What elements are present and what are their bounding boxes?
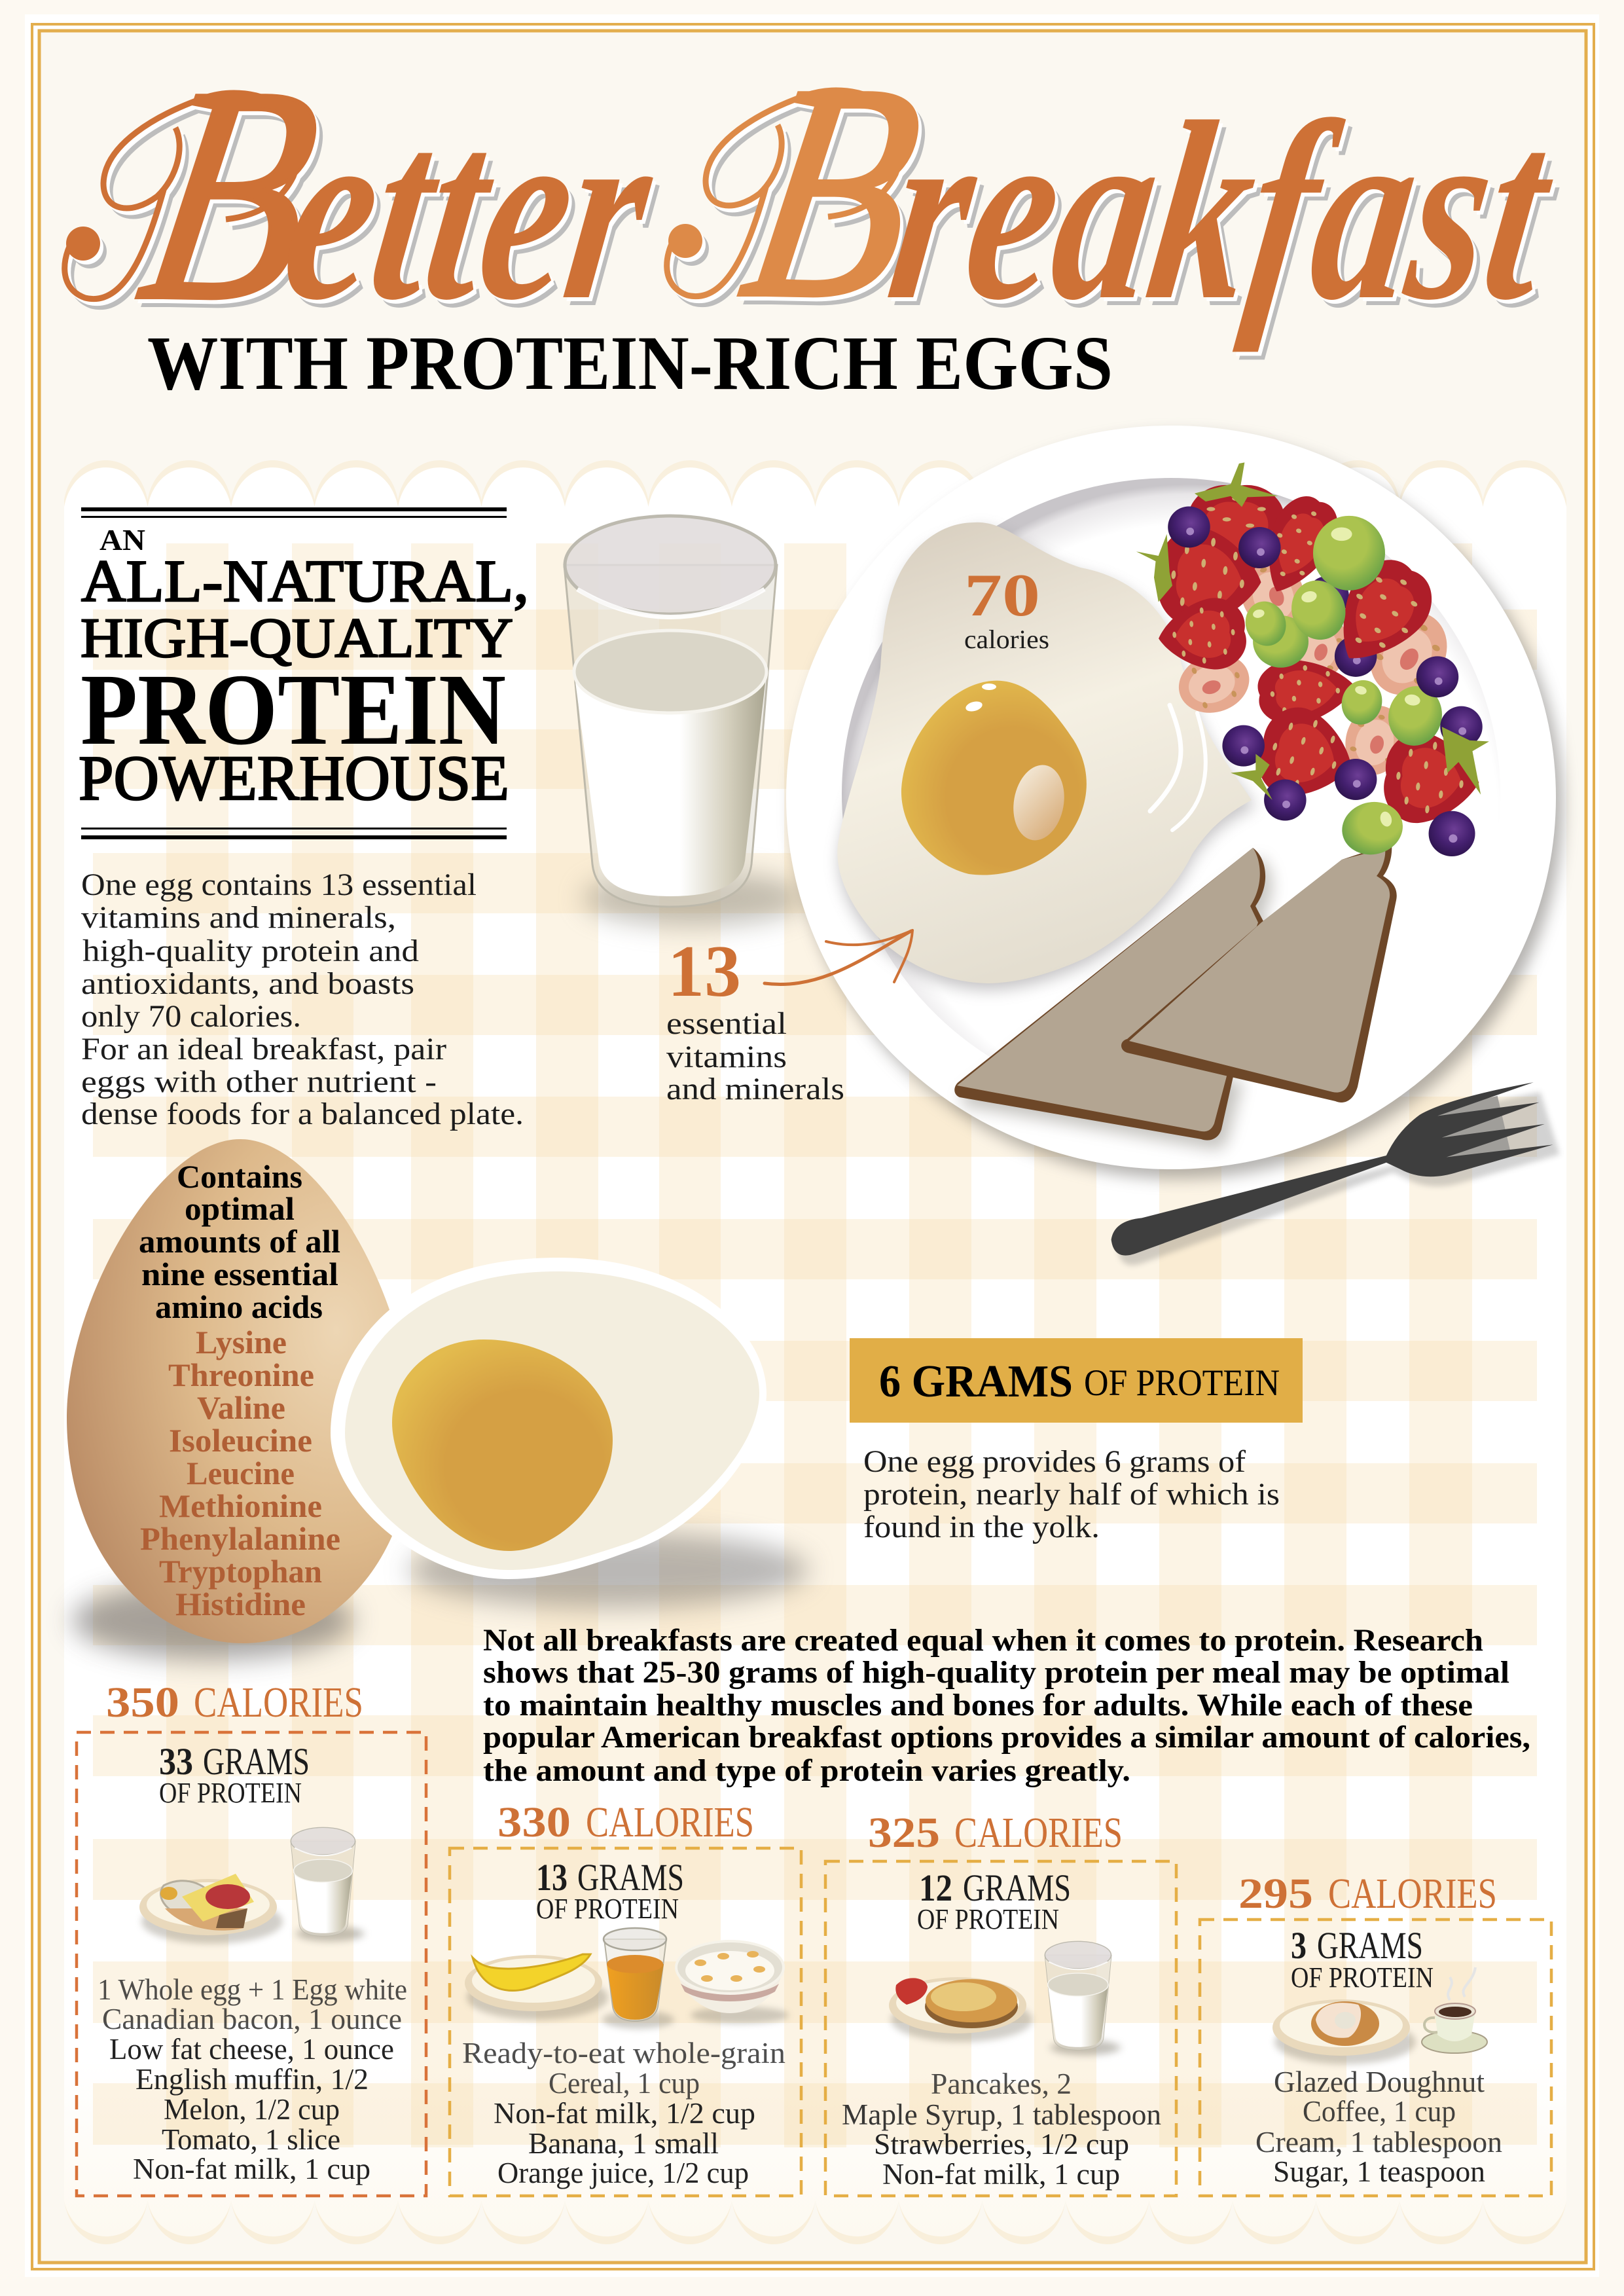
calories heading — [1238, 1870, 1497, 1918]
ingredients: Non-fat milk, 1 cup — [882, 2158, 1120, 2191]
6 grams paragraph: One egg provides 6 grams of — [863, 1444, 1246, 1479]
13 essential vitamins and minerals: vitamins — [666, 1040, 787, 1074]
ingredients: Banana, 1 small — [528, 2127, 719, 2160]
amino acid list: Tryptophan — [159, 1553, 322, 1590]
protein research paragraph: popular American breakfast options provides a similar amount of calories, — [483, 1720, 1530, 1755]
ingredients: Maple Syrup, 1 tablespoon — [842, 2098, 1161, 2131]
amino acid intro — [139, 1158, 340, 1325]
calories heading: CALORIES — [194, 1679, 363, 1726]
protein amount: OF PROTEIN — [917, 1903, 1059, 1935]
ingredients: English muffin, 1/2 — [135, 2063, 369, 2096]
ingredients: Canadian bacon, 1 ounce — [102, 2003, 402, 2035]
arrow to egg — [765, 930, 912, 984]
protein amount: OF PROTEIN — [1291, 1961, 1434, 1994]
fork — [1111, 1082, 1560, 1266]
headline: all-natural protein powerhouse — [79, 507, 529, 839]
calories heading: 350 — [106, 1679, 179, 1726]
amino acid list: Methionine — [159, 1487, 322, 1524]
protein research paragraph: to maintain healthy muscles and bones for adults. While each of these — [483, 1688, 1473, 1722]
amino acid list: Lysine — [196, 1324, 287, 1360]
protein amount: 12 — [919, 1867, 952, 1909]
ingredients: Non-fat milk, 1 cup — [133, 2153, 370, 2185]
ingredients: Non-fat milk, 1/2 cup — [494, 2097, 755, 2130]
icon: egg muffin plate — [139, 1874, 283, 1944]
intro paragraph: only 70 calories. — [81, 999, 301, 1034]
amino acid list: Isoleucine — [169, 1422, 312, 1459]
ingredients: Melon, 1/2 cup — [164, 2093, 340, 2126]
calories heading: 330 — [497, 1798, 571, 1846]
protein amount — [159, 1740, 310, 1809]
ingredients: Glazed Doughnut — [1274, 2066, 1485, 2098]
calories heading — [106, 1679, 363, 1726]
icon: banana plate — [465, 1954, 608, 2020]
calories heading: CALORIES — [954, 1809, 1123, 1857]
protein amount: 33 — [159, 1740, 193, 1783]
card: 350 calories — [77, 1679, 426, 2196]
amino acid intro: amounts of all — [139, 1223, 340, 1260]
ingredients — [462, 2037, 785, 2189]
amino acid list: Threonine — [168, 1357, 314, 1393]
protein amount: GRAMS — [963, 1867, 1071, 1909]
70 calories — [964, 562, 1049, 654]
13 essential vitamins and minerals: 13 — [668, 931, 741, 1012]
icon: doughnut plate — [1272, 1999, 1416, 2064]
protein amount — [1291, 1924, 1434, 1994]
70 calories: 70 — [964, 562, 1040, 629]
toast slices — [954, 843, 1397, 1150]
word: Breakfast: reakfast — [876, 69, 1570, 354]
protein research paragraph — [483, 1623, 1530, 1788]
amino acid list: Leucine — [187, 1455, 295, 1491]
intro paragraph: eggs with other nutrient - — [81, 1065, 437, 1099]
yolk — [901, 681, 1087, 875]
calories heading: 295 — [1238, 1870, 1313, 1918]
13 essential vitamins and minerals — [666, 931, 844, 1106]
boiled egg half — [331, 1258, 809, 1608]
plate — [786, 426, 1563, 1178]
word: Better — [65, 24, 670, 364]
intro paragraph: antioxidants, and boasts — [81, 966, 414, 1001]
glass of milk — [564, 516, 805, 926]
card: 325 calories — [825, 1809, 1176, 2196]
ingredients: Sugar, 1 teaspoon — [1273, 2155, 1485, 2188]
word: Better: etter — [270, 69, 670, 354]
amino acid list: Histidine — [175, 1586, 306, 1622]
13 essential vitamins and minerals: essential — [666, 1006, 787, 1041]
amino acid intro: Contains — [177, 1158, 302, 1195]
protein research paragraph: the amount and type of protein varies greatly. — [483, 1753, 1130, 1788]
intro paragraph: dense foods for a balanced plate. — [81, 1097, 524, 1131]
70 calories: calories — [964, 625, 1049, 654]
plate with egg, fruit and toast — [786, 426, 1563, 1178]
ingredients — [1255, 2066, 1502, 2188]
13 essential vitamins and minerals: and minerals — [666, 1072, 844, 1106]
protein amount: GRAMS — [577, 1856, 684, 1899]
ingredients: Tomato, 1 slice — [162, 2123, 340, 2156]
fruit salad — [1136, 462, 1489, 861]
ingredients: Cereal, 1 cup — [549, 2067, 700, 2100]
ingredients: Ready-to-eat whole-grain — [462, 2037, 785, 2069]
ingredients: 1 Whole egg + 1 Egg white — [98, 1973, 407, 2006]
intro paragraph: One egg contains 13 essential — [81, 867, 477, 902]
calories heading: CALORIES — [586, 1798, 754, 1846]
amino acid intro: amino acids — [155, 1288, 323, 1325]
icon: milk glass — [1045, 1941, 1121, 2055]
intro paragraph — [81, 867, 524, 1131]
intro paragraph: For an ideal breakfast, pair — [81, 1032, 446, 1066]
headline: all-natural protein powerhouse: PROTEIN — [81, 653, 506, 766]
6 grams paragraph: found in the yolk. — [863, 1510, 1100, 1544]
protein amount: GRAMS — [1317, 1924, 1423, 1967]
protein research paragraph: Not all breakfasts are created equal when it comes to protein. Research — [483, 1623, 1483, 1658]
amino acid list: Valine — [197, 1389, 285, 1426]
headline: all-natural protein powerhouse: POWERHOUSE — [79, 743, 509, 814]
ingredients — [842, 2068, 1161, 2191]
protein amount: 3 — [1291, 1924, 1307, 1967]
headline: all-natural protein powerhouse: ALL-NATURAL, — [81, 548, 529, 614]
brown egg with amino acids — [67, 1139, 412, 1660]
protein amount — [536, 1856, 684, 1925]
ingredients: Coffee, 1 cup — [1303, 2095, 1456, 2128]
headline: all-natural protein powerhouse: AN — [99, 523, 145, 556]
fried egg — [837, 522, 1255, 990]
icon: cereal bowl — [676, 1941, 789, 2024]
calories heading: CALORIES — [1328, 1870, 1497, 1918]
card: 330 calories — [450, 1798, 801, 2196]
scalloped tablecloth panel — [64, 460, 1566, 2244]
amino acid list: Phenylalanine — [140, 1520, 340, 1557]
word: Breakfast: B — [725, 21, 942, 361]
ingredients: Low fat cheese, 1 ounce — [109, 2033, 394, 2066]
ingredients: Orange juice, 1/2 cup — [497, 2157, 749, 2189]
amino acid list — [140, 1324, 340, 1622]
protein amount: OF PROTEIN — [159, 1777, 302, 1809]
headline: all-natural protein powerhouse: HIGH-QUALITY — [81, 606, 513, 669]
calories heading — [497, 1798, 754, 1846]
word: Better: B — [122, 24, 340, 364]
icon: orange juice — [602, 1928, 674, 2029]
6 grams of protein banner — [850, 1338, 1303, 1423]
protein amount — [917, 1867, 1071, 1935]
ingredients: Pancakes, 2 — [931, 2068, 1072, 2100]
6 grams paragraph: protein, nearly half of which is — [863, 1477, 1280, 1512]
intro paragraph: high-quality protein and — [82, 934, 419, 968]
6 grams of protein banner: 6 GRAMS — [879, 1357, 1073, 1407]
protein amount: OF PROTEIN — [536, 1893, 679, 1925]
intro paragraph: vitamins and minerals, — [81, 900, 396, 935]
amino acid intro: optimal — [185, 1190, 295, 1227]
yolk — [392, 1339, 613, 1551]
ingredients: Strawberries, 1/2 cup — [874, 2128, 1129, 2160]
icon: milk glass — [291, 1827, 364, 1941]
6 grams paragraph — [863, 1444, 1280, 1544]
calories heading: 325 — [868, 1809, 940, 1857]
subtitle: WITH PROTEIN-RICH EGGS — [147, 320, 1113, 406]
title: Better Breakfast — [65, 21, 1570, 364]
icon: pancake plate — [889, 1977, 1032, 2042]
protein amount: 13 — [536, 1856, 568, 1899]
amino acid intro: nine essential — [141, 1256, 338, 1292]
word: Breakfast — [667, 21, 1570, 361]
ingredients: Cream, 1 tablespoon — [1255, 2126, 1502, 2159]
calories heading — [868, 1809, 1123, 1857]
card: 295 calories — [1200, 1870, 1551, 2196]
protein research paragraph: shows that 25-30 grams of high-quality protein per meal may be optimal — [483, 1655, 1509, 1690]
6 grams of protein banner: OF PROTEIN — [1084, 1362, 1280, 1404]
icon: coffee cup — [1422, 1967, 1487, 2053]
protein amount: GRAMS — [203, 1740, 310, 1783]
ingredients — [98, 1973, 407, 2185]
